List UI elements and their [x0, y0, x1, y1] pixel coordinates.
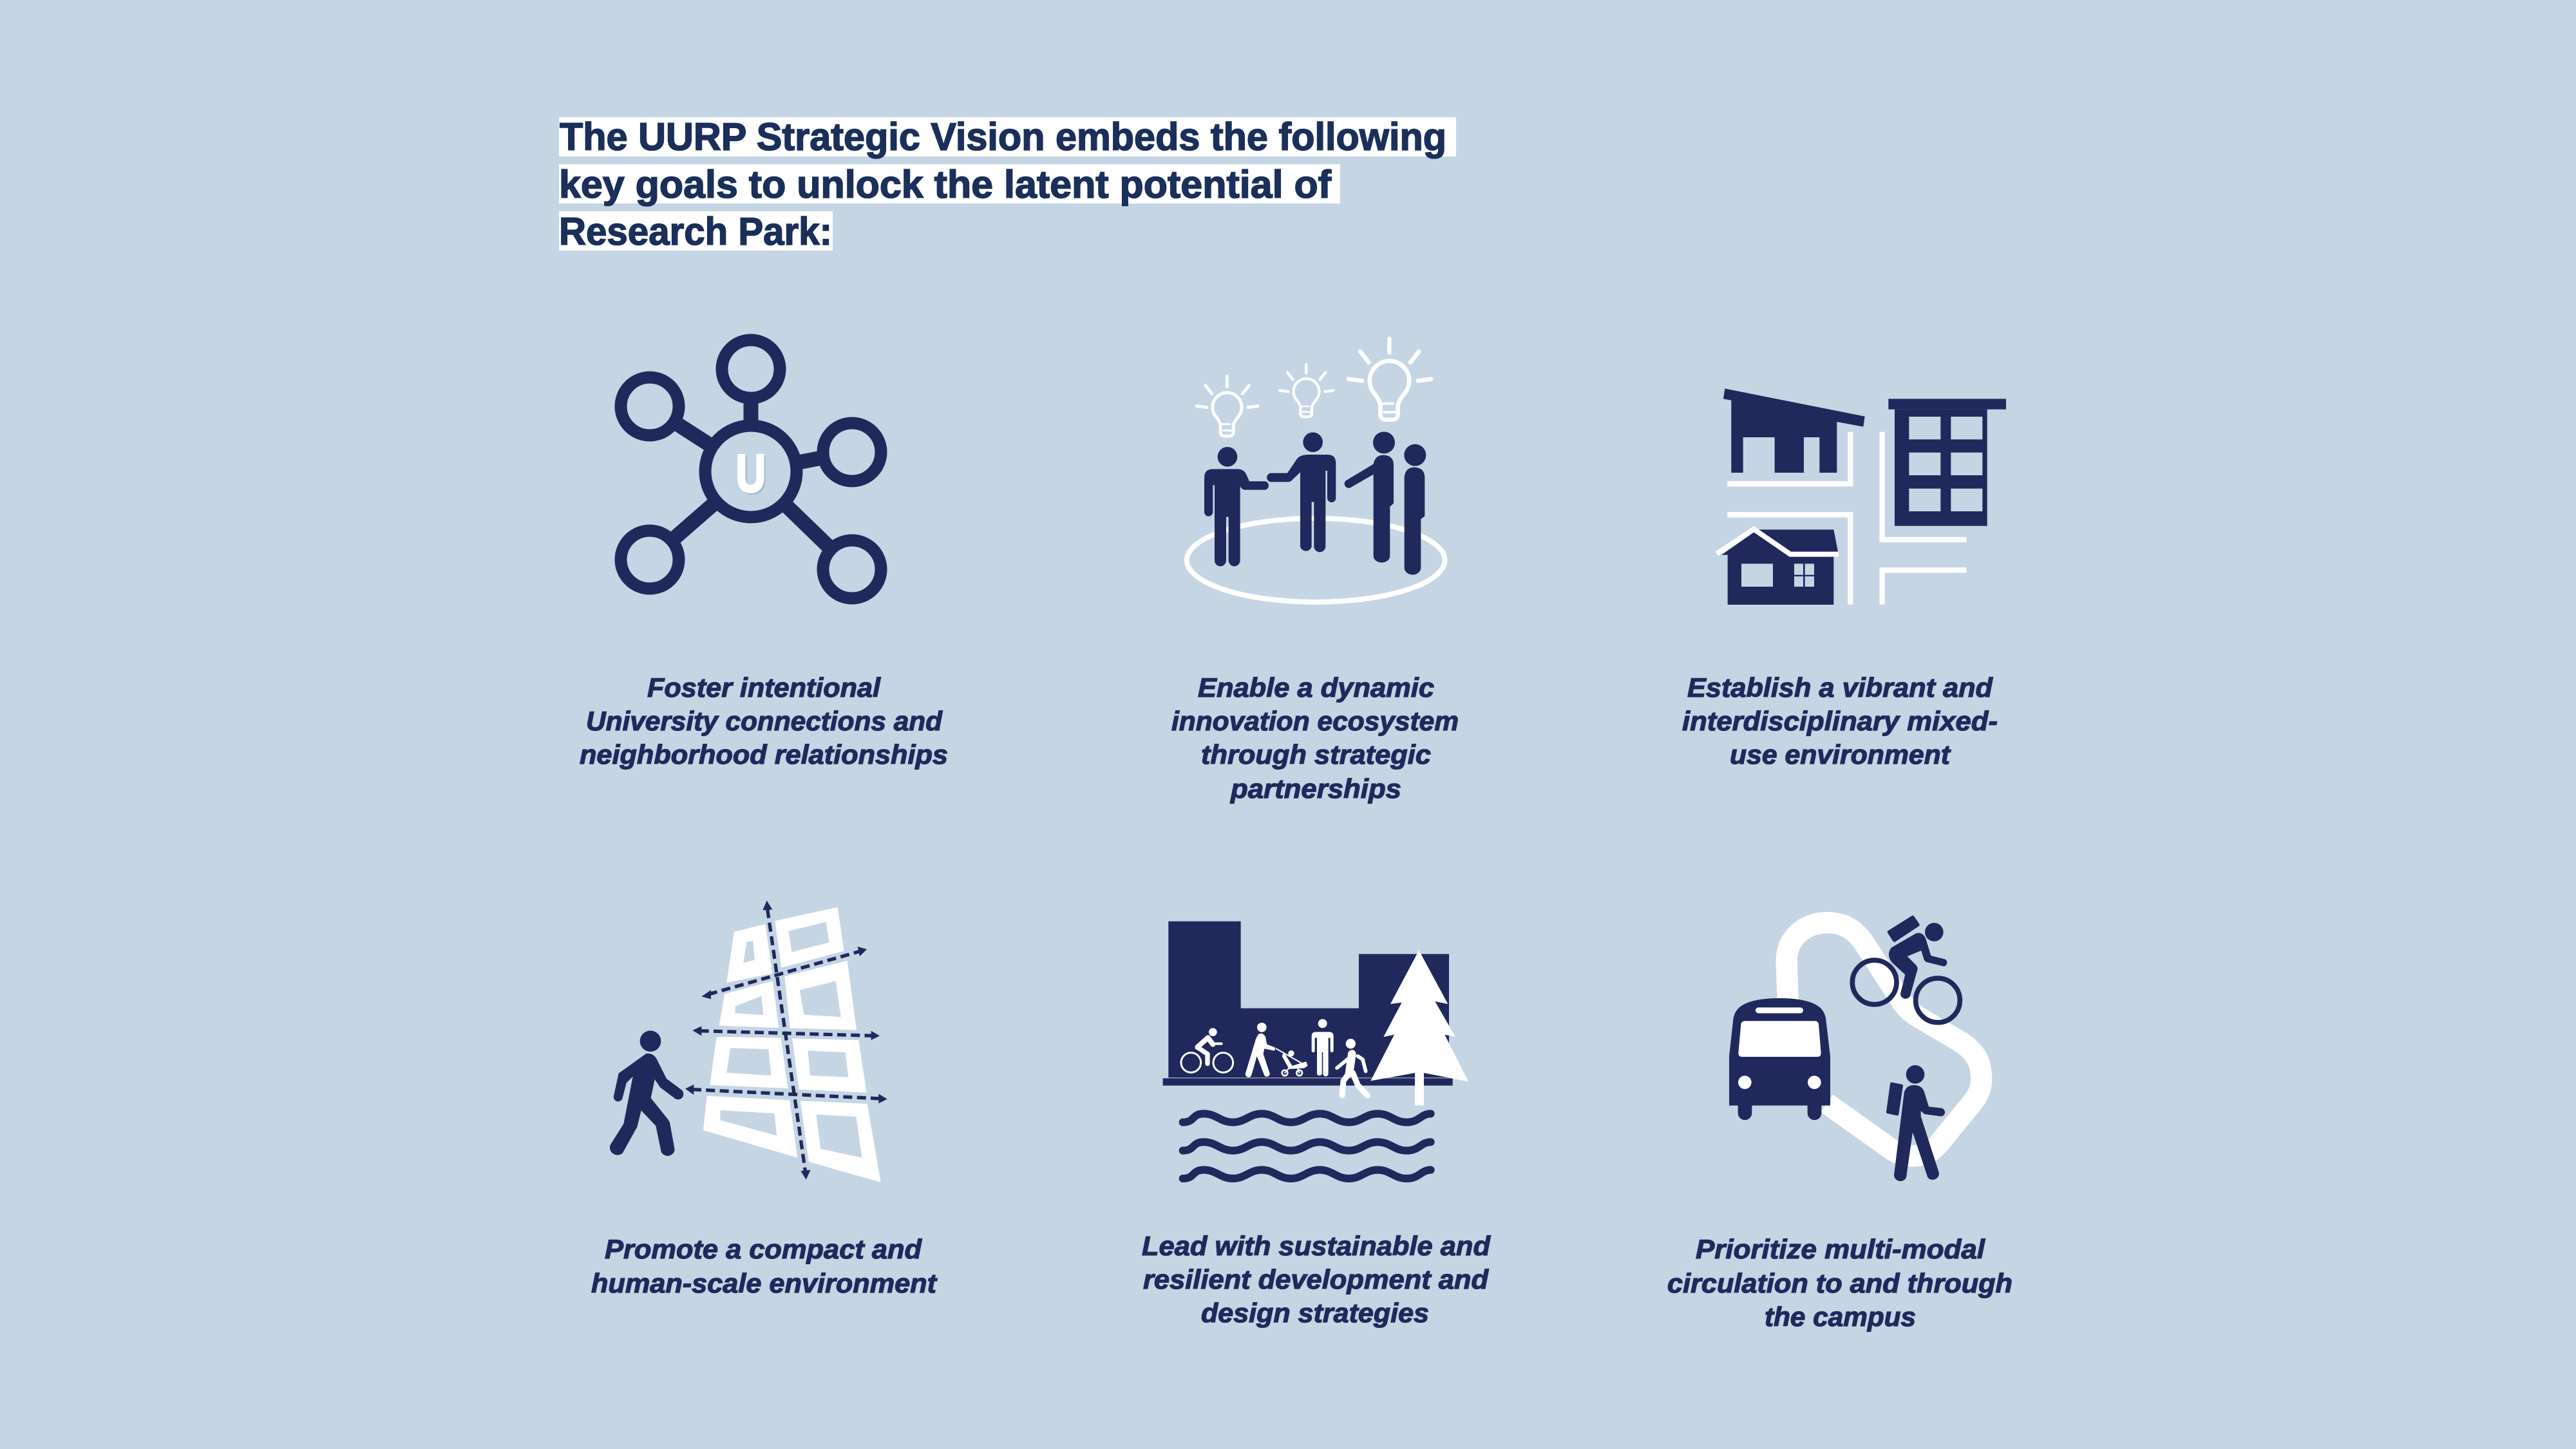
caption: innovation ecosystem: through strategic [1201, 739, 1431, 770]
caption: compact environment: human-scale environment [591, 1268, 938, 1298]
icon: multi-modal circulation [1729, 917, 1982, 1181]
caption: sustainable development: design strategies [1201, 1298, 1429, 1328]
caption: university connections: Foster intentional [647, 672, 881, 703]
caption: university connections: University connections and [586, 706, 943, 736]
caption: innovation ecosystem: innovation ecosystem [1171, 706, 1459, 736]
icon: mixed-use buildings and streets [1717, 388, 2006, 605]
caption: mixed-use environment: use environment [1730, 739, 1951, 770]
caption: sustainable development: resilient development and [1143, 1264, 1489, 1294]
title [559, 115, 1456, 253]
caption: university connections [580, 672, 948, 770]
caption: sustainable development [1142, 1231, 1491, 1328]
caption: innovation ecosystem: partnerships [1230, 773, 1401, 804]
caption: innovation ecosystem [1171, 672, 1459, 804]
caption: mixed-use environment [1682, 672, 1998, 770]
icon: university network [621, 340, 881, 598]
icon: compact street grid and pedestrian [610, 900, 887, 1182]
caption: multi-modal circulation: circulation to and through [1667, 1268, 2012, 1298]
caption: mixed-use environment: interdisciplinary mixed- [1682, 706, 1998, 736]
caption: multi-modal circulation: the campus [1765, 1302, 1916, 1332]
icon: sustainable waterfront development [1163, 922, 1468, 1179]
caption: innovation ecosystem: Enable a dynamic [1198, 672, 1434, 703]
title: Research Park: [559, 210, 832, 253]
caption: sustainable development: Lead with sustainable and [1142, 1231, 1491, 1261]
title: The UURP Strategic Vision embeds the following [560, 115, 1446, 158]
caption: university connections: neighborhood relationships [580, 739, 948, 770]
caption: mixed-use environment: Establish a vibrant and [1687, 672, 1993, 703]
title: key goals to unlock the latent potential of [559, 163, 1332, 206]
caption: multi-modal circulation [1667, 1234, 2012, 1332]
caption: compact environment [591, 1234, 938, 1298]
icon: university network: U [736, 444, 766, 503]
icon: innovation ecosystem people and lightbulbs [1187, 339, 1444, 602]
caption: multi-modal circulation: Prioritize multi-modal [1696, 1234, 1985, 1264]
caption: compact environment: Promote a compact and [605, 1234, 922, 1264]
